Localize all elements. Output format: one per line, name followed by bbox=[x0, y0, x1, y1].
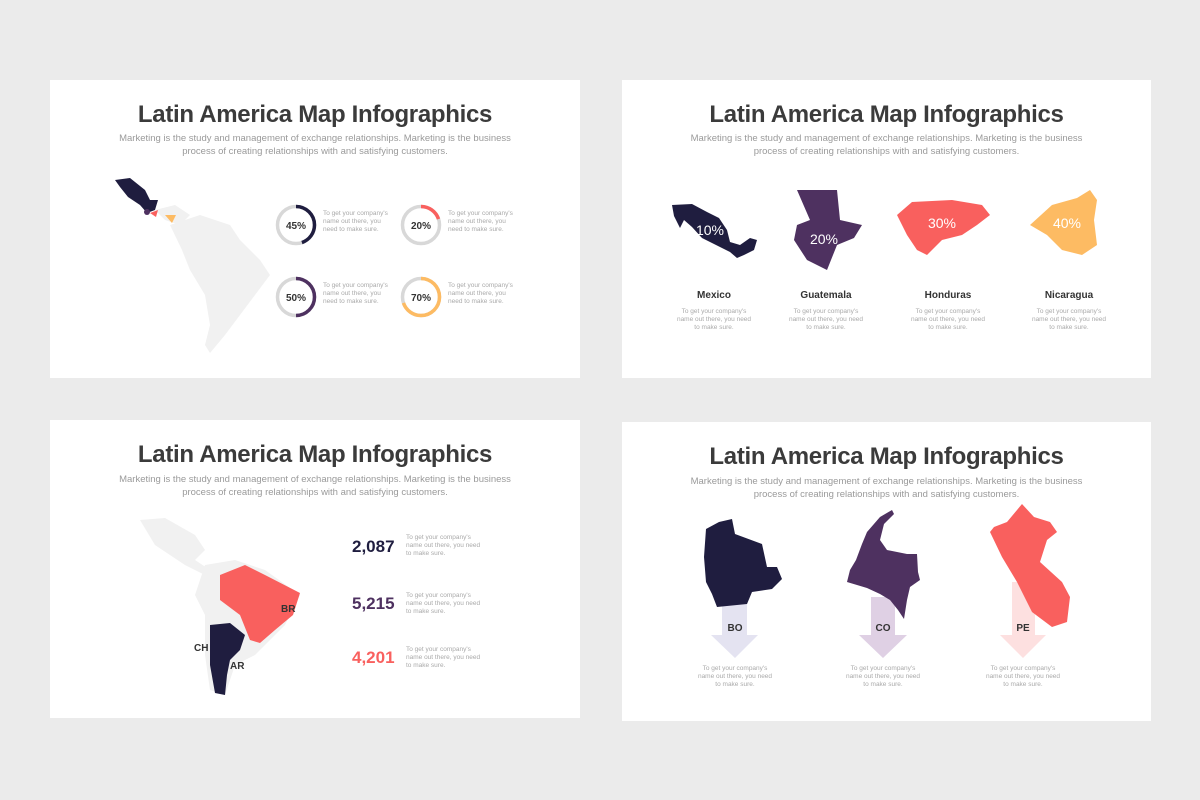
circle stats: To get your company's bbox=[448, 210, 513, 217]
panel: numbers bbox=[50, 420, 580, 718]
panel: countries: name out there, you need bbox=[789, 316, 863, 323]
subtitle bbox=[119, 474, 511, 498]
circle stats: name out there, you bbox=[323, 290, 381, 297]
panel: countries bbox=[622, 80, 1151, 378]
panel: numbers: to make sure. bbox=[406, 662, 445, 669]
panel: arrows: to make sure. bbox=[1003, 681, 1043, 688]
circle stats: name out there, you bbox=[448, 290, 506, 297]
subtitle: Marketing is the study and management of exchange relationships. Marketing is the business bbox=[119, 133, 511, 144]
panel: numbers: name out there, you need bbox=[406, 654, 480, 661]
panel: arrows: name out there, you need bbox=[846, 673, 920, 680]
panel: countries: Honduras bbox=[925, 290, 971, 301]
country shapes: 40% bbox=[1053, 215, 1081, 231]
panel: countries: to make sure. bbox=[1049, 324, 1089, 331]
subtitle: Marketing is the study and management of exchange relationships. Marketing is the business bbox=[119, 474, 511, 485]
circle stats: need to make sure. bbox=[448, 226, 504, 233]
country shapes bbox=[672, 190, 1097, 270]
panel: countries: to make sure. bbox=[694, 324, 734, 331]
circle stats: need to make sure. bbox=[448, 298, 504, 305]
panel: countries: name out there, you need bbox=[677, 316, 751, 323]
country shapes: 30% bbox=[928, 215, 956, 231]
panel: countries: name out there, you need bbox=[911, 316, 985, 323]
panel: numbers: 4,201 bbox=[352, 648, 395, 667]
panel: numbers: name out there, you need bbox=[406, 542, 480, 549]
panel: countries: To get your company's bbox=[916, 308, 980, 315]
panel: arrows: name out there, you need bbox=[698, 673, 772, 680]
panel: numbers: To get your company's bbox=[406, 534, 471, 541]
title: Latin America Map Infographics bbox=[138, 441, 492, 468]
circle stats bbox=[276, 204, 513, 318]
circle stats: 45% bbox=[286, 221, 306, 232]
panel: numbers: AR bbox=[230, 661, 244, 672]
circle stats: name out there, you bbox=[448, 218, 506, 225]
country shapes: 10% bbox=[696, 222, 724, 238]
panel: countries: Nicaragua bbox=[1045, 290, 1093, 301]
panel: countries: name out there, you need bbox=[1032, 316, 1106, 323]
circle stats: To get your company's bbox=[448, 282, 513, 289]
subtitle: process of creating relationships with and satisfying customers. bbox=[182, 487, 448, 498]
panel: countries: To get your company's bbox=[794, 308, 858, 315]
circle stats: name out there, you bbox=[323, 218, 381, 225]
panel: arrows bbox=[622, 422, 1151, 721]
country labels: BR bbox=[281, 604, 295, 615]
title: Latin America Map Infographics bbox=[709, 101, 1064, 128]
circle stats: 70% bbox=[411, 293, 431, 304]
panel: arrows: To get your company's bbox=[991, 665, 1055, 672]
circle stats: need to make sure. bbox=[323, 226, 379, 233]
subtitle bbox=[691, 133, 1082, 157]
title: Latin America Map Infographics bbox=[709, 443, 1064, 470]
panel: numbers: To get your company's bbox=[406, 592, 471, 599]
subtitle: Marketing is the study and management of exchange relationships. Marketing is the business bbox=[691, 476, 1082, 487]
panel: arrows: name out there, you need bbox=[986, 673, 1060, 680]
panel: countries: to make sure. bbox=[928, 324, 968, 331]
subtitle: process of creating relationships with and satisfying customers. bbox=[182, 146, 448, 157]
shapes and arrows: CO bbox=[876, 623, 891, 634]
map: latin america bbox=[115, 178, 270, 352]
shapes and arrows bbox=[704, 504, 1070, 658]
shapes and arrows: BO bbox=[728, 623, 743, 634]
title: Latin America Map Infographics bbox=[138, 101, 492, 128]
labels: Mexico bbox=[697, 290, 731, 301]
panel: numbers: 5,215 bbox=[352, 594, 395, 613]
map bbox=[140, 518, 300, 695]
numbers: 2,087 bbox=[352, 537, 395, 556]
panel: numbers: CH bbox=[194, 643, 208, 654]
circle stats: 50% bbox=[286, 293, 306, 304]
subtitle: process of creating relationships with and satisfying customers. bbox=[754, 146, 1019, 157]
panel: arrows: to make sure. bbox=[715, 681, 755, 688]
subtitle: process of creating relationships with and satisfying customers. bbox=[754, 489, 1019, 500]
circle stats: need to make sure. bbox=[323, 298, 379, 305]
subtitle bbox=[691, 476, 1082, 500]
panel: countries: To get your company's bbox=[1037, 308, 1101, 315]
panel: arrows: To get your company's bbox=[703, 665, 767, 672]
subtitle: Marketing is the study and management of exchange relationships. Marketing is the business bbox=[691, 133, 1082, 144]
subtitle bbox=[119, 133, 511, 157]
panel: circles bbox=[50, 80, 580, 378]
circle stats: To get your company's bbox=[323, 282, 388, 289]
panel: countries: Guatemala bbox=[800, 290, 852, 301]
shapes and arrows: PE bbox=[1016, 623, 1030, 634]
panel: arrows: to make sure. bbox=[863, 681, 903, 688]
panel: countries: To get your company's bbox=[682, 308, 746, 315]
country shapes: 20% bbox=[810, 231, 838, 247]
panel: arrows: To get your company's bbox=[851, 665, 915, 672]
panel: countries: to make sure. bbox=[806, 324, 846, 331]
panel: numbers: To get your company's bbox=[406, 646, 471, 653]
panel: numbers: to make sure. bbox=[406, 608, 445, 615]
circle stats: 20% bbox=[411, 221, 431, 232]
panel: numbers: to make sure. bbox=[406, 550, 445, 557]
circle stats: To get your company's bbox=[323, 210, 388, 217]
panel: numbers: name out there, you need bbox=[406, 600, 480, 607]
